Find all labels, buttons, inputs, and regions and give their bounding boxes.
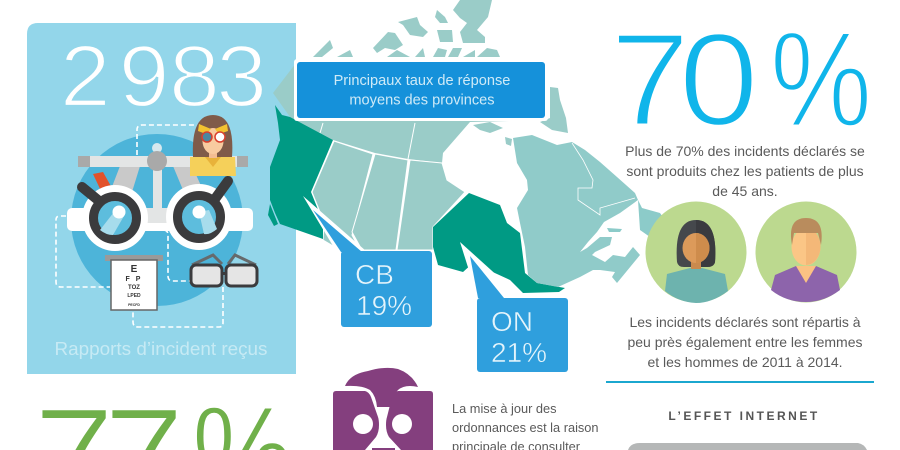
arctic islands (313, 0, 568, 146)
icon: eye chart: LPED (127, 293, 141, 299)
Quebec border (572, 143, 635, 215)
grey device top (628, 443, 867, 450)
Alberta (312, 141, 373, 250)
icon: man avatar (756, 202, 856, 302)
icon: eyeglasses (191, 255, 257, 286)
heading: internet effect: L’EFFET INTERNET (668, 409, 820, 423)
icon: purple phoropter (333, 368, 433, 450)
Ontario value: 21% (491, 337, 547, 368)
territorial border (320, 123, 415, 159)
panel: incident reports (27, 23, 296, 374)
map of Canada (268, 0, 665, 293)
big number 77% (34, 378, 294, 450)
callout: Ontario (460, 242, 568, 372)
icon: eye chart: E (131, 264, 138, 275)
big number 2 983: 2983 (60, 27, 267, 125)
Manitoba (397, 160, 465, 250)
text: prescription updates: La mise à jour des (452, 401, 557, 416)
text: age of patients: Plus de 70% des incidents déclarés se (625, 143, 865, 159)
British Columbia value: 19% (356, 290, 412, 321)
callout text: Principaux taux de réponse (334, 73, 510, 89)
caption: reports received: Rapports d’incident reçus (54, 339, 268, 359)
text: gender distribution: et les hommes de 2011 à 2014. (647, 354, 843, 370)
illustration: optometry trial frame (67, 134, 253, 306)
icon: eye chart (105, 255, 163, 310)
text: gender distribution: peu près également entre les femmes (627, 334, 863, 350)
big number 70% (610, 3, 872, 155)
Quebec and Atlantic provinces (513, 135, 640, 287)
Newfoundland (638, 200, 665, 237)
big number 70%: 70 (610, 6, 759, 154)
big number 70%: % (770, 3, 872, 155)
callout text: moyens des provinces (349, 92, 495, 108)
callout: British Columbia (303, 196, 432, 327)
icon: eye chart: PECFD (128, 303, 140, 307)
icon: eye chart: TOZ (128, 285, 140, 291)
text: gender distribution: Les incidents déclarés sont répartis à (629, 314, 861, 330)
callout: provincial response rates (294, 59, 548, 121)
Ontario (433, 193, 565, 293)
icon: woman trying glasses (190, 115, 236, 176)
Vancouver Island and coastal islands (268, 204, 278, 226)
icon: woman avatar (646, 202, 746, 303)
Ontario value: ON (491, 306, 533, 337)
British Columbia (270, 105, 333, 239)
text: age of patients: sont produits chez les patients de plus (626, 163, 864, 179)
British Columbia value: CB (355, 259, 394, 290)
territories (273, 63, 545, 163)
Prince Edward Island (607, 228, 622, 232)
icon: eye chart: F P (126, 276, 142, 283)
dashed connector lines (56, 125, 223, 327)
text: prescription updates: ordonnances est la raison (452, 420, 599, 435)
Saskatchewan (352, 154, 408, 250)
text: age of patients: de 45 ans. (712, 183, 778, 199)
